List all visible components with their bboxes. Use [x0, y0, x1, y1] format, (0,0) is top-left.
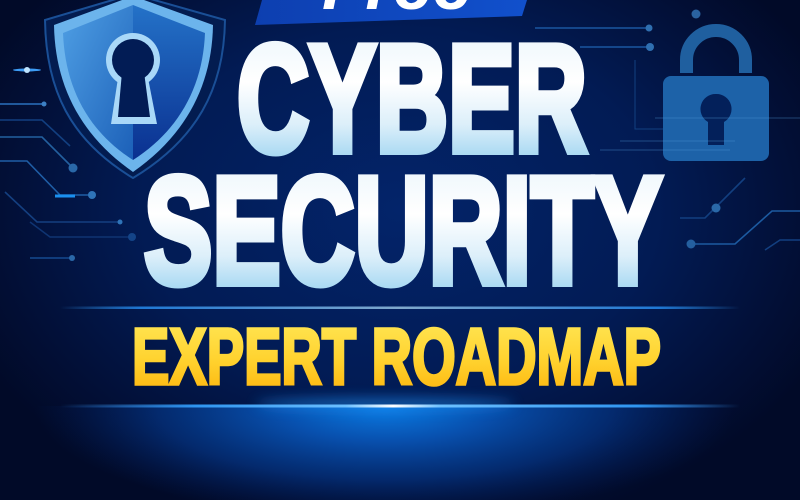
title line 1: CYBER: [237, 14, 587, 184]
top divider: [60, 306, 740, 309]
shield left half: [63, 5, 133, 160]
lock keyhole: [700, 94, 732, 145]
shield right half: [133, 5, 205, 160]
shield outer rim: [45, 0, 225, 178]
shield icon: [45, 0, 225, 178]
badge: Free: [255, 0, 527, 25]
circuit lines right: [535, 10, 800, 250]
bottom divider: [60, 398, 740, 410]
keyhole: [106, 33, 160, 124]
shackle: [686, 31, 746, 73]
title: Cyber Security: [144, 14, 662, 316]
padlock icon: [600, 31, 800, 161]
bottom glow: [0, 406, 800, 500]
lock body: [663, 76, 769, 161]
circuit lines left: [0, 102, 136, 261]
spark: [13, 67, 41, 73]
shield light border: [54, 0, 213, 172]
